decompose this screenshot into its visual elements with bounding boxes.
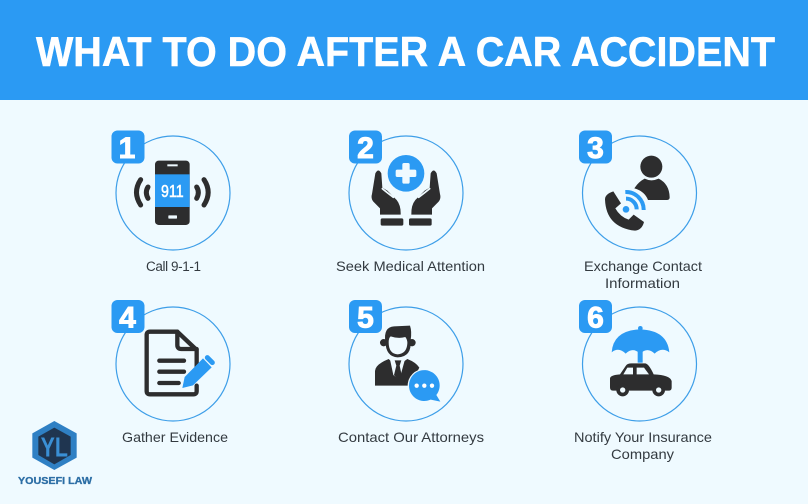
badge 4: 4 bbox=[119, 302, 136, 334]
badge 5: 5 bbox=[357, 302, 374, 334]
logo wordmark: YOUSEFI LAW bbox=[18, 476, 93, 487]
badge 6: 6 bbox=[587, 302, 604, 334]
step 3: exchange contact information bbox=[579, 130, 702, 291]
header banner bbox=[0, 0, 808, 100]
icon: phone 911 bbox=[136, 161, 208, 225]
badge 2: 2 bbox=[357, 132, 374, 165]
badge 4 bbox=[112, 300, 144, 334]
badge 2 bbox=[349, 130, 382, 165]
icon: umbrella over car bbox=[610, 326, 672, 396]
step 6: notify your insurance company bbox=[574, 300, 712, 462]
icon: person and phone bbox=[605, 156, 670, 231]
label: Seek Medical Attention bbox=[336, 258, 485, 274]
step 5: contact our attorneys bbox=[338, 300, 484, 445]
badge 1 bbox=[112, 130, 144, 165]
icon: phone 911: 911 bbox=[161, 181, 184, 201]
icon: document and pencil bbox=[147, 332, 212, 394]
badge 3 bbox=[579, 130, 612, 165]
icon: attorney with speech bubble bbox=[375, 326, 441, 402]
badge 5 bbox=[349, 300, 382, 334]
label: Exchange Contact bbox=[584, 258, 702, 274]
badge 1: 1 bbox=[119, 132, 135, 165]
badge 3: 3 bbox=[587, 132, 604, 165]
label: Information bbox=[605, 275, 680, 291]
badge 6 bbox=[579, 300, 612, 334]
logo hexagon mark: YL bbox=[41, 432, 68, 463]
step 4: gather evidence bbox=[112, 300, 230, 445]
label bbox=[584, 258, 702, 291]
step 2: seek medical attention bbox=[336, 130, 485, 274]
label: Gather Evidence bbox=[122, 429, 228, 445]
logo: Yousefi Law bbox=[18, 421, 93, 487]
icon: hands with medical cross bbox=[372, 155, 440, 226]
label: Company bbox=[611, 446, 674, 462]
label bbox=[574, 429, 712, 462]
title: WHAT TO DO AFTER A CAR ACCIDENT bbox=[36, 28, 775, 75]
label: Call 9-1-1 bbox=[146, 259, 201, 274]
label: Notify Your Insurance bbox=[574, 429, 712, 445]
label: Contact Our Attorneys bbox=[338, 429, 484, 445]
step 1: call 9-1-1 bbox=[112, 130, 230, 274]
